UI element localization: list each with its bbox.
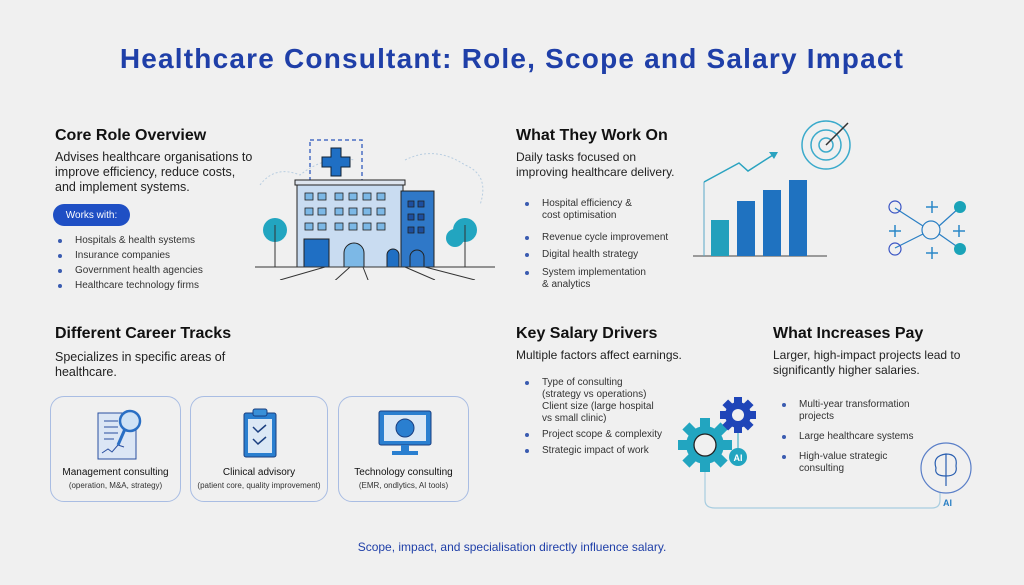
- list: pay factors: consulting: [799, 463, 844, 474]
- text: drivers description: Multiple factors affect earnings.: [516, 348, 682, 362]
- text: tracks description: Specializes in specific areas of healthcare.: [55, 350, 225, 379]
- chart: rising bars: [693, 120, 851, 256]
- card: management consulting: (operation, M&A, strategy): [69, 481, 162, 490]
- heading: work on: What They Work On: [516, 127, 668, 144]
- list: clients: [58, 235, 203, 291]
- icon: monitor: [378, 410, 432, 455]
- icon: gears with AI: AI: [943, 498, 952, 508]
- pill: works with: Works with:: [66, 210, 117, 220]
- illustration: hospital: [255, 139, 495, 280]
- list: tasks: System implementation: [542, 267, 646, 278]
- icon: gears with AI: [678, 397, 972, 509]
- list: tasks: [525, 198, 668, 290]
- list: drivers: vs small clinic): [542, 413, 606, 424]
- list: clients: Healthcare technology firms: [75, 280, 199, 291]
- list: tasks: Digital health strategy: [542, 249, 638, 260]
- heading: increases pay: What Increases Pay: [773, 325, 923, 342]
- panel: career tracks: [55, 325, 231, 379]
- card: clinical advisory: (patient core, quality improvement): [197, 481, 321, 490]
- list: drivers: Type of consulting: [542, 377, 623, 388]
- heading: salary drivers: Key Salary Drivers: [516, 325, 657, 342]
- list: drivers: Client size (large hospital: [542, 401, 654, 412]
- icon: network: [888, 200, 966, 259]
- list: tasks: cost optimisation: [542, 210, 616, 221]
- panel: what increases pay: [773, 325, 960, 474]
- icon: report magnifier: [98, 410, 142, 460]
- text: pay description: Larger, high-impact projects lead to significantly higher salaries.: [773, 348, 960, 377]
- text: work description: Daily tasks focused on improving healthcare delivery.: [516, 150, 675, 179]
- list: drivers: Project scope & complexity: [542, 429, 662, 440]
- list: tasks: & analytics: [542, 279, 590, 290]
- list: pay factors: Multi-year transformation: [799, 399, 910, 410]
- list: pay factors: [782, 399, 914, 474]
- icon: clipboard: [244, 408, 276, 458]
- icon: gears with AI: AI: [734, 453, 742, 463]
- list: clients: Hospitals & health systems: [75, 235, 195, 246]
- list: pay factors: High-value strategic: [799, 451, 887, 462]
- card: technology consulting: Technology consulting: [354, 467, 453, 478]
- list: pay factors: Large healthcare systems: [799, 431, 914, 442]
- panel: what they work on: [516, 127, 675, 290]
- heading: core role: Core Role Overview: [55, 127, 206, 144]
- list: pay factors: projects: [799, 411, 834, 422]
- heading: career tracks: Different Career Tracks: [55, 325, 231, 342]
- card: clinical advisory: [190, 396, 328, 502]
- list: clients: Government health agencies: [75, 265, 203, 276]
- list: drivers: Strategic impact of work: [542, 445, 649, 456]
- card: clinical advisory: Clinical advisory: [223, 467, 295, 478]
- pill: works with: [53, 204, 130, 226]
- panel: core role: [53, 127, 252, 291]
- text: core role description: Advises healthcare organisations to improve efficiency, reduce costs, and implement systems.: [55, 150, 252, 194]
- list: tasks: Revenue cycle improvement: [542, 232, 668, 243]
- card: management consulting: Management consulting: [62, 467, 169, 478]
- title: Healthcare Consultant: Role, Scope and Salary Impact: [120, 43, 904, 74]
- panel: key salary drivers: [516, 325, 682, 456]
- card: technology consulting: [338, 396, 469, 502]
- card: management consulting: [50, 396, 181, 502]
- list: drivers: [525, 377, 662, 456]
- list: tasks: Hospital efficiency &: [542, 198, 632, 209]
- footer text: Scope, impact, and specialisation directly influence salary.: [358, 540, 666, 554]
- icon: target: [802, 121, 850, 169]
- list: drivers: (strategy vs operations): [542, 389, 646, 400]
- card: technology consulting: (EMR, ondlytics, AI tools): [359, 481, 448, 490]
- list: clients: Insurance companies: [75, 250, 170, 261]
